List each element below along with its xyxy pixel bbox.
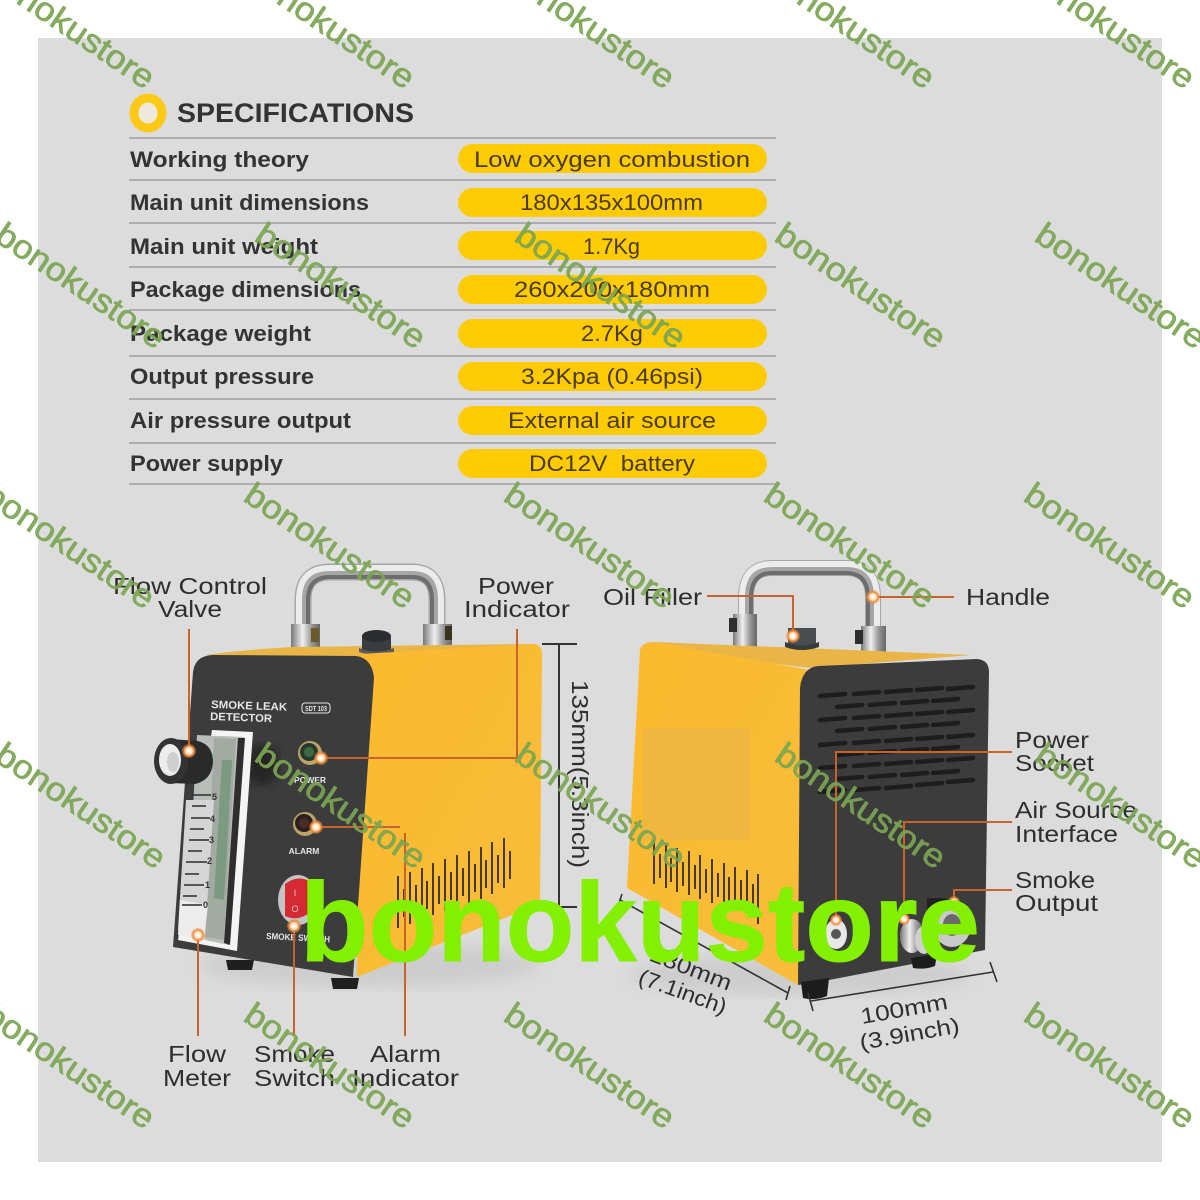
callout labels: Flow Control	[113, 573, 267, 599]
watermark: repeated diagonal store name: bonokustore	[238, 995, 422, 1136]
front black face	[173, 655, 374, 977]
model text: DETECTOR	[210, 711, 272, 725]
watermark: repeated diagonal store name: bonokustore	[1029, 735, 1200, 876]
watermark: repeated diagonal store name: bonokustore	[1018, 475, 1200, 616]
specification table: Output pressure	[130, 364, 314, 389]
power lamp: POWER	[294, 775, 326, 785]
callout labels: Indicator	[464, 596, 570, 622]
watermark: repeated diagonal store name: bonokustore	[509, 215, 693, 356]
callout labels: Socket	[1015, 750, 1095, 776]
specification table: External air source	[508, 408, 716, 433]
watermark: repeated diagonal store name: bonokustore	[498, 475, 682, 616]
product: rear view of detector	[627, 564, 989, 999]
label patch	[643, 728, 750, 840]
flow meter tube	[178, 730, 253, 951]
callout labels: Indicator	[352, 1065, 459, 1091]
dimension: depth: 180mm	[646, 941, 735, 995]
specification table: Air pressure output	[130, 408, 352, 433]
flow meter tube: 4	[210, 814, 215, 824]
handle: front unit	[291, 568, 452, 652]
callout labels: Valve	[158, 596, 222, 622]
watermark: repeated diagonal store name: bonokustore	[249, 735, 433, 876]
watermark: repeated diagonal store name: bonokustore	[758, 475, 942, 616]
feet	[801, 954, 937, 999]
dimension: height	[542, 644, 593, 907]
specification table: 2.7Kg	[581, 321, 643, 346]
flow control valve knob	[154, 738, 213, 784]
watermark: repeated diagonal store name: bonokustore	[498, 995, 682, 1136]
filler cap	[785, 628, 819, 650]
flow meter shadow	[246, 745, 278, 785]
power lamp	[294, 741, 326, 785]
smoke switch: SMOKE SWITCH	[266, 931, 330, 944]
feet	[226, 960, 359, 989]
callout labels: Oil Filler	[603, 584, 702, 610]
flow meter tube: 5	[212, 792, 217, 802]
callout labels	[113, 573, 1137, 1091]
specification table	[129, 138, 776, 484]
flow meter tube: 1	[205, 880, 210, 890]
flow meter tube: 3	[209, 835, 214, 845]
watermark: repeated diagonal store name: bonokustore	[758, 995, 942, 1136]
specification table: 260x200x180mm	[514, 277, 710, 302]
handle: rear unit	[729, 564, 886, 652]
specification table: Main unit dimensions	[130, 190, 369, 215]
side vents	[398, 838, 510, 928]
specification table: Working theory	[130, 147, 310, 172]
oil filler knob	[359, 630, 394, 655]
rear black face	[798, 659, 989, 985]
specification table: Low oxygen combustion	[474, 147, 750, 172]
top surface	[640, 642, 971, 668]
flow meter tube: 0	[203, 900, 208, 910]
product: front view of detector	[154, 568, 542, 989]
callout labels: Smoke	[254, 1041, 335, 1067]
callout labels: Flow	[168, 1041, 226, 1067]
callout labels: Switch	[254, 1065, 335, 1091]
callout labels: Alarm	[370, 1041, 441, 1067]
callout labels: Air Source	[1015, 797, 1137, 823]
dimension: width: (3.9inch)	[858, 1013, 961, 1055]
callout lines	[189, 596, 1012, 1036]
callout labels: Interface	[1015, 821, 1118, 847]
power socket	[825, 919, 847, 949]
specification table: Main unit weight	[130, 234, 319, 259]
specification table: Power supply	[130, 451, 284, 476]
watermark: repeated diagonal store name: bonokustore	[769, 735, 953, 876]
specification table: Package dimensions	[130, 277, 361, 302]
watermark: repeated diagonal store name: bonokustore	[509, 735, 693, 876]
dimension: width: 100mm	[859, 989, 950, 1029]
alarm lamp	[289, 812, 319, 856]
watermark: large store name: bonokustore	[300, 860, 980, 985]
yellow side panel	[627, 642, 810, 985]
model text: SDT 103	[305, 704, 327, 713]
specification table: 1.7Kg	[583, 234, 640, 259]
heading: specifications: SPECIFICATIONS	[177, 98, 414, 128]
top surface	[205, 644, 533, 660]
model text	[210, 699, 330, 725]
watermark: repeated diagonal store name: bonokustore	[249, 215, 433, 356]
callout labels: Meter	[163, 1065, 231, 1091]
watermark: repeated diagonal store name: bonokustore	[1029, 215, 1200, 356]
specification table: DC12V battery	[529, 451, 695, 476]
dimension: depth	[618, 894, 790, 1019]
smoke switch: I	[294, 888, 296, 898]
flow meter tube: 2	[207, 856, 212, 866]
dimension: height: 135mm(5.3inch)	[567, 680, 593, 868]
side vents	[654, 840, 758, 924]
specification table: Package weight	[130, 321, 312, 346]
specification table: 180x135x100mm	[520, 190, 703, 215]
callout labels: Handle	[966, 584, 1050, 610]
air source fitting	[900, 919, 933, 954]
specification table: 3.2Kpa (0.46psi)	[521, 364, 703, 389]
watermark: repeated diagonal store name: bonokustore	[238, 475, 422, 616]
model text: SMOKE LEAK	[211, 699, 287, 714]
watermark: repeated diagonal store name: bonokustore	[1018, 995, 1200, 1136]
dimension: depth: (7.1inch)	[635, 964, 730, 1019]
callout labels: Smoke	[1015, 867, 1095, 893]
smoke switch: O	[291, 904, 299, 914]
vent slots	[820, 687, 973, 792]
smoke output fitting	[933, 903, 971, 947]
rocker block	[927, 898, 946, 915]
dimension: width	[808, 962, 997, 1055]
callout labels: Power	[478, 573, 554, 599]
callout labels: Power	[1015, 727, 1089, 753]
alarm lamp: ALARM	[289, 846, 319, 856]
yellow side panel	[357, 644, 542, 977]
callout dots	[182, 590, 960, 942]
smoke switch	[266, 875, 330, 944]
callout labels: Output	[1015, 890, 1099, 916]
watermark: repeated diagonal store name: bonokustore	[769, 215, 953, 356]
